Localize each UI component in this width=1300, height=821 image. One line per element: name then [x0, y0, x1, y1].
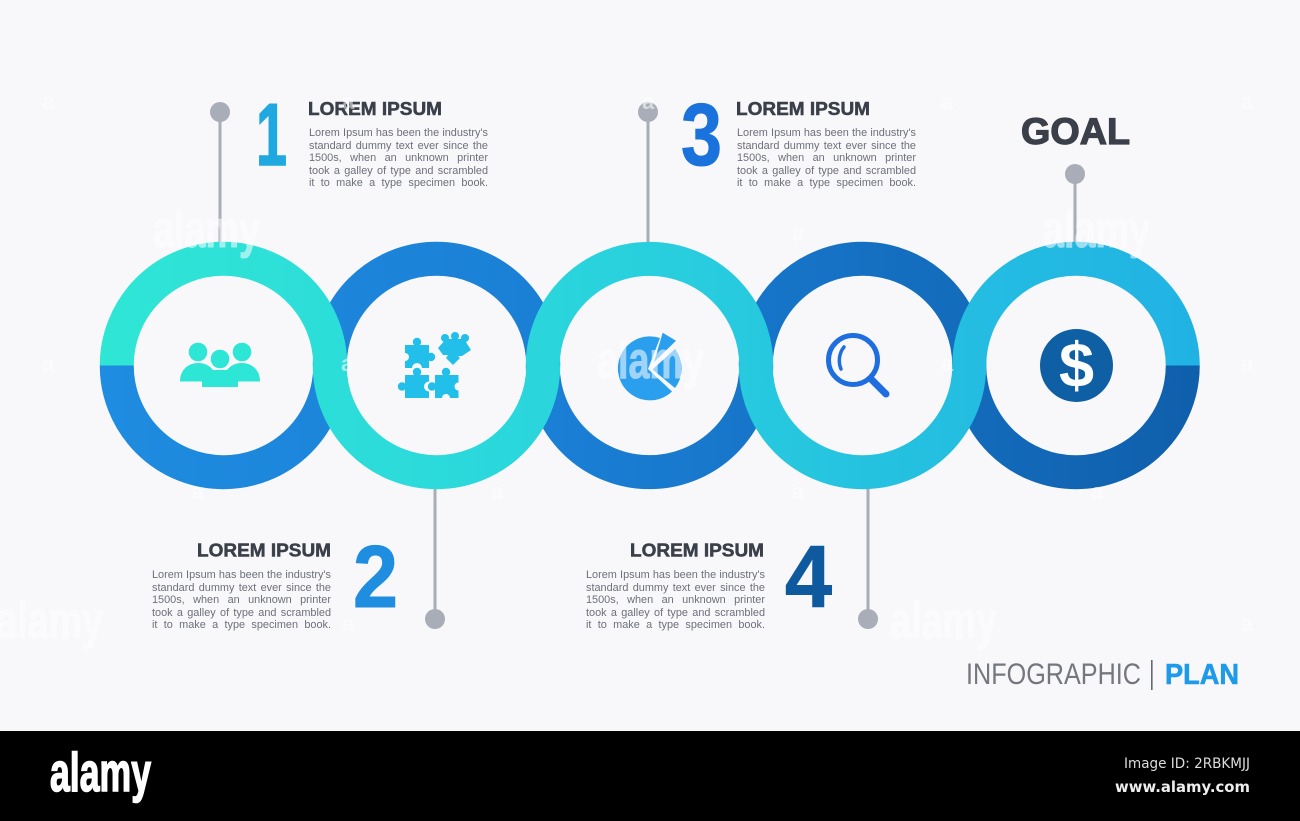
connector stems and dots — [210, 102, 1085, 629]
ring halves: teal — [117, 259, 1183, 472]
body text 3: standard dummy text ever since the — [737, 140, 916, 152]
alamy watermarks: a — [192, 479, 205, 504]
body text 4: standard dummy text ever since the — [586, 582, 765, 594]
icon: pie chart — [618, 333, 682, 400]
alamy watermarks: a — [941, 89, 954, 114]
stem 2 — [425, 484, 445, 629]
stem 1 — [210, 102, 230, 248]
heading 2: LOREM IPSUM — [197, 540, 331, 560]
numeral 4: 4 — [785, 527, 832, 626]
footer title: PLAN — [1165, 659, 1239, 691]
body text 1: it to make a type specimen book. — [309, 177, 488, 189]
body text 1 — [309, 127, 488, 189]
icon: dollar coin — [1040, 329, 1113, 402]
alamy watermarks: a — [1241, 351, 1254, 376]
body text 4: took a galley of type and scrambled — [586, 606, 765, 618]
body text 4 — [586, 569, 765, 631]
body text 1: took a galley of type and scrambled — [309, 164, 488, 176]
alamy watermarks: alamy — [890, 592, 997, 650]
body text 3: Lorem Ipsum has been the industry's — [737, 127, 916, 139]
stem 4 — [858, 484, 878, 629]
body text 3: 1500s, when an unknown printer — [737, 152, 916, 164]
footer title: INFOGRAPHIC — [966, 658, 1141, 691]
alamy watermarks: a — [941, 351, 954, 376]
alamy watermarks: a — [342, 611, 355, 636]
numeral 1: 1 — [256, 85, 287, 184]
alamy watermarks: a — [42, 351, 55, 376]
alamy watermarks — [0, 89, 1254, 650]
body text 4: Lorem Ipsum has been the industry's — [586, 569, 765, 581]
icon: puzzle — [398, 332, 471, 402]
body text 2: took a galley of type and scrambled — [152, 606, 331, 618]
alamy watermarks: alamy — [0, 592, 103, 650]
alamy watermarks: alamy — [597, 332, 704, 390]
alamy watermarks: a — [641, 607, 654, 632]
ring halves: blue — [117, 259, 1183, 472]
heading 3: LOREM IPSUM — [736, 99, 870, 119]
alamy watermarks: a — [792, 221, 805, 246]
icon: people — [180, 343, 260, 387]
alamy watermarks: a — [1241, 89, 1254, 114]
goal heading: GOAL — [1021, 111, 1130, 152]
alamy watermarks: a — [642, 89, 655, 114]
alamy watermarks: alamy — [1043, 201, 1150, 259]
alamy watermarks: a — [341, 351, 354, 376]
alamy watermarks: a — [1241, 611, 1254, 636]
body text 3: it to make a type specimen book. — [737, 177, 916, 189]
body text 4: 1500s, when an unknown printer — [586, 594, 765, 606]
body text 4: it to make a type specimen book. — [586, 619, 765, 631]
stem goal — [1065, 164, 1085, 248]
alamy watermarks: a — [42, 89, 55, 114]
alamy watermarks: a — [342, 89, 355, 114]
body text 2: 1500s, when an unknown printer — [152, 594, 331, 606]
icon: dollar coin: $ — [1059, 331, 1094, 401]
heading 4: LOREM IPSUM — [630, 540, 764, 560]
alamy logo: alamy — [50, 741, 151, 803]
body text 2: standard dummy text ever since the — [152, 582, 331, 594]
numeral 2: 2 — [353, 527, 398, 626]
icon: magnifier — [828, 336, 886, 394]
interlocking rings — [117, 259, 1183, 472]
numeral 3: 3 — [681, 85, 722, 184]
alamy watermarks: a — [792, 479, 805, 504]
heading 1: LOREM IPSUM — [308, 99, 442, 119]
alamy watermarks: alamy — [153, 201, 260, 259]
body text 2: Lorem Ipsum has been the industry's — [152, 569, 331, 581]
body text 3 — [737, 127, 916, 189]
alamy watermarks: a — [1091, 479, 1104, 504]
black footer band — [0, 731, 1300, 821]
body text 2 — [152, 569, 331, 631]
body text 2: it to make a type specimen book. — [152, 619, 331, 631]
alamy watermarks: a — [491, 479, 504, 504]
image id: Image ID: 2RBKMJJ — [1124, 756, 1250, 772]
body text 1: 1500s, when an unknown printer — [309, 152, 488, 164]
stem 3 — [638, 102, 658, 248]
body text 3: took a galley of type and scrambled — [737, 164, 916, 176]
body text 1: Lorem Ipsum has been the industry's — [309, 127, 488, 139]
website: www.alamy.com — [1115, 778, 1250, 796]
body text 1: standard dummy text ever since the — [309, 140, 488, 152]
